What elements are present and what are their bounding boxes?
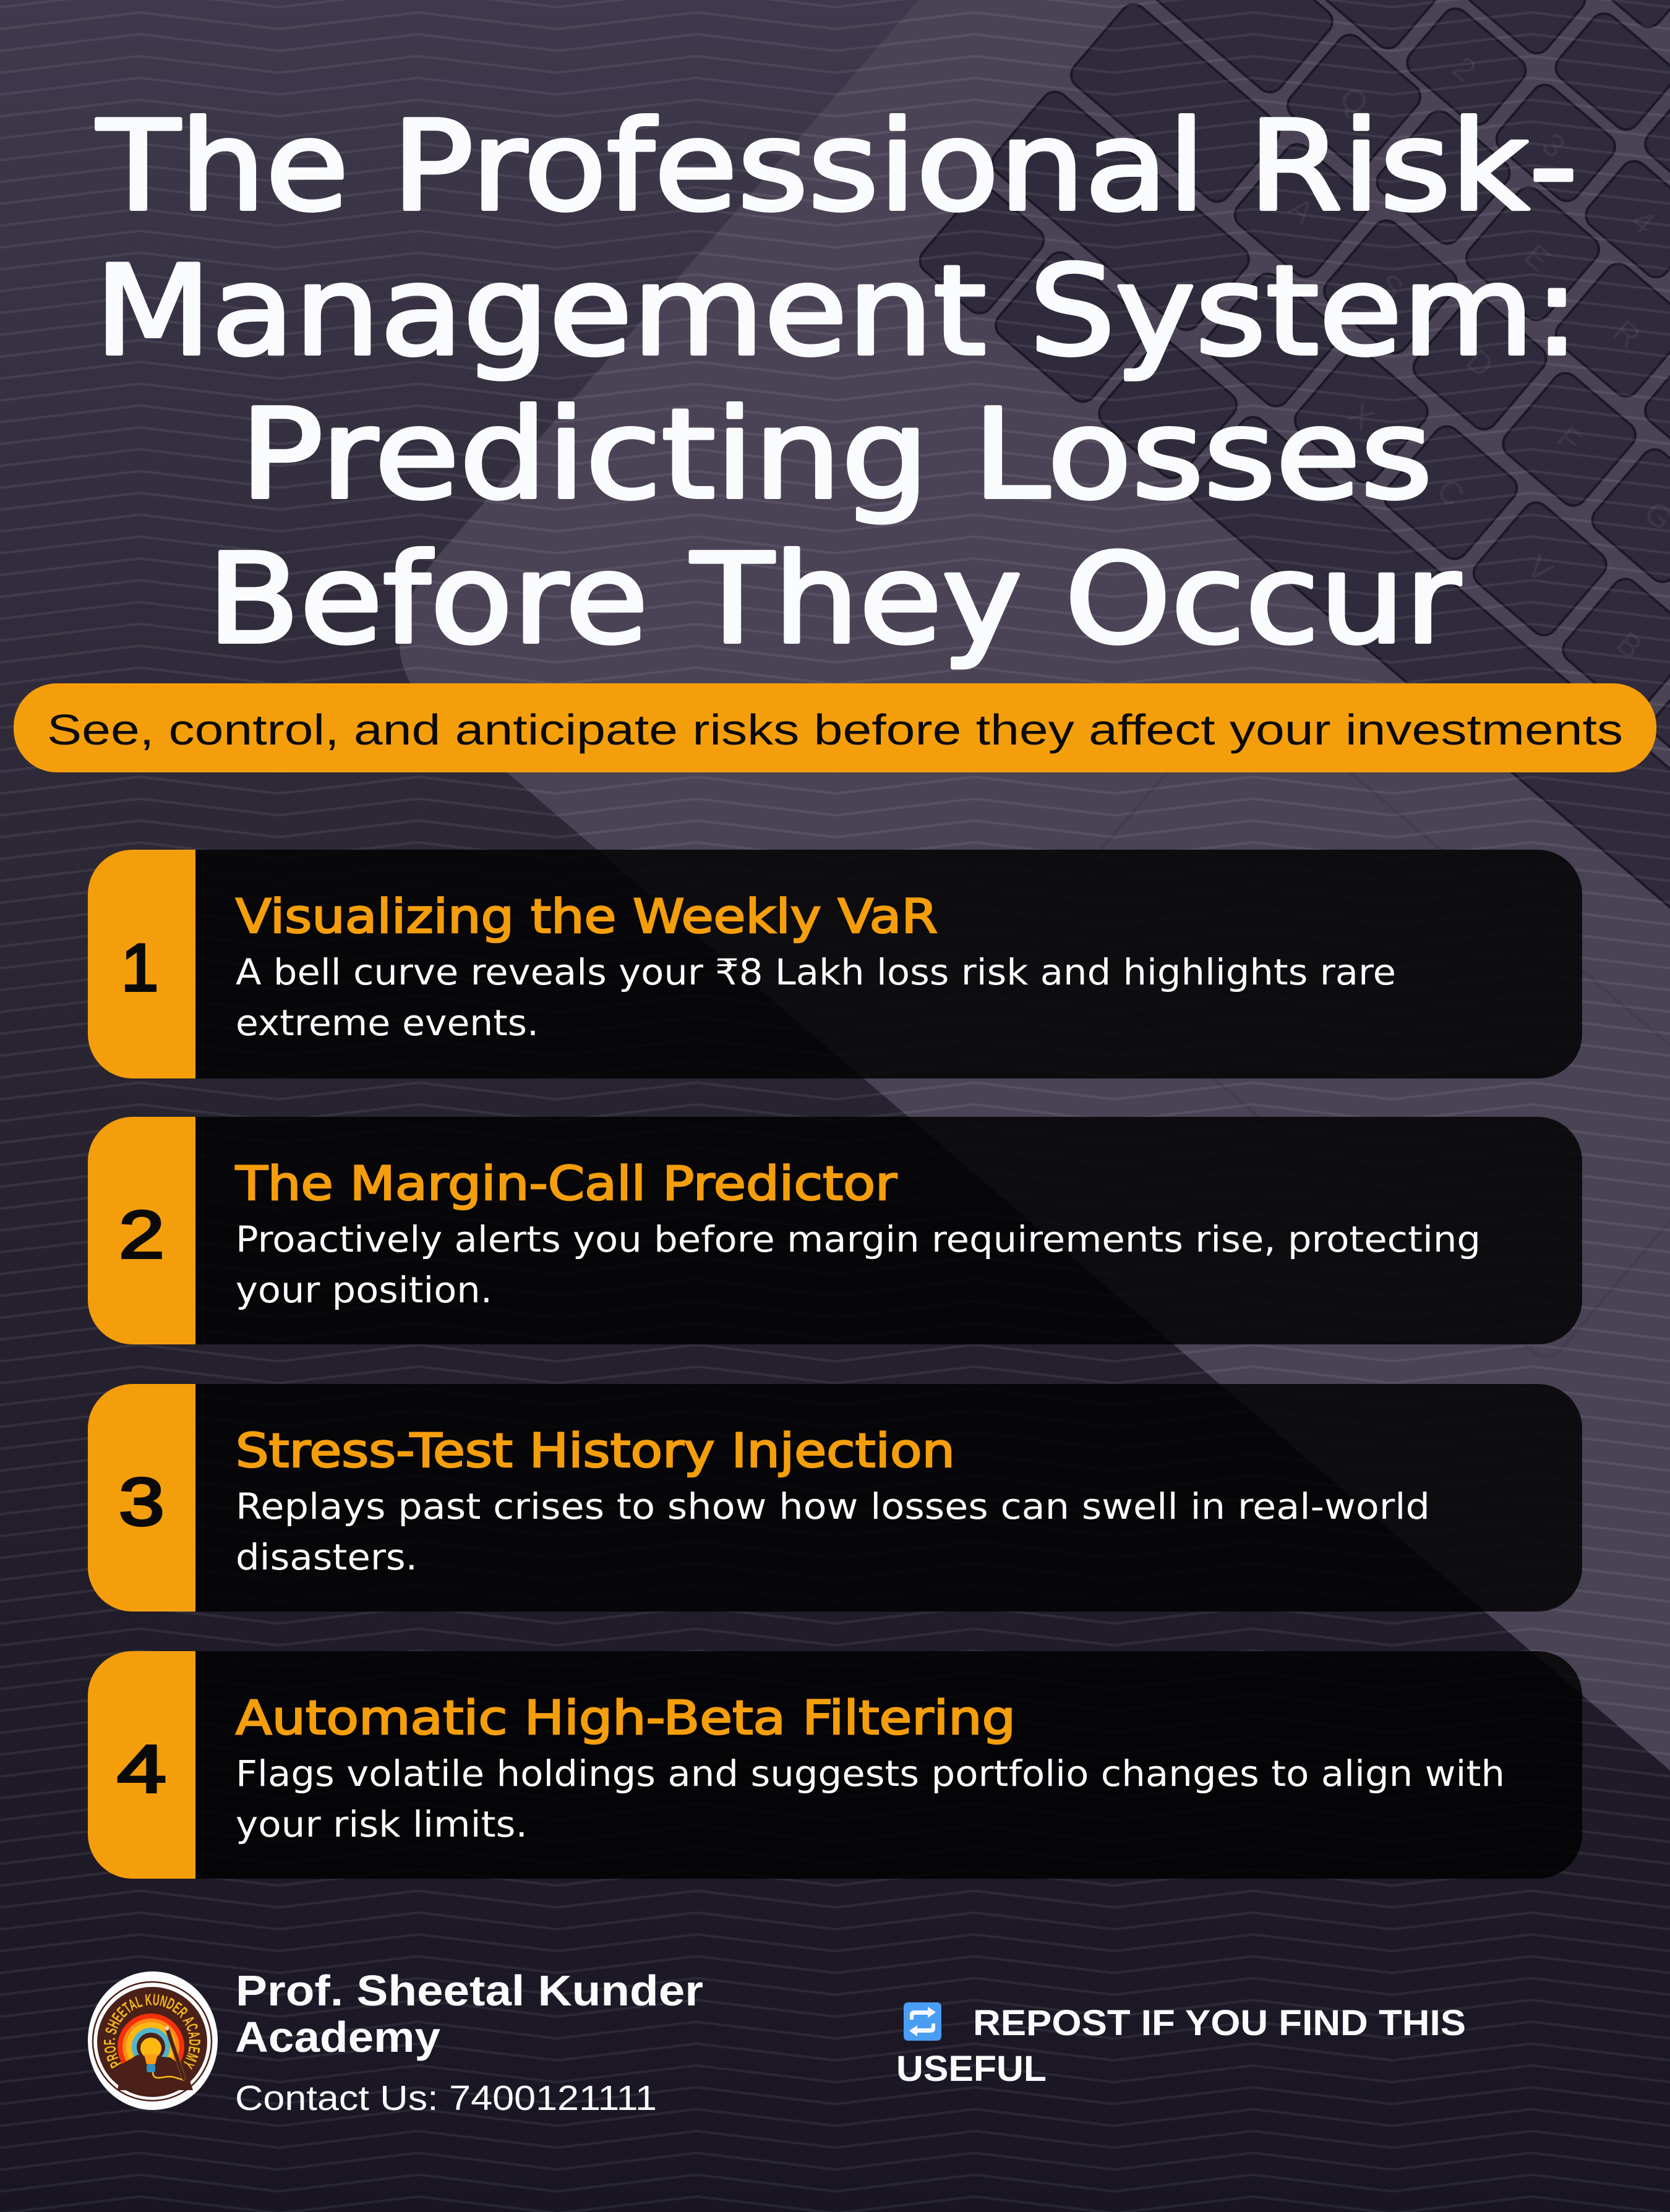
title: The Professional Risk-: [96, 95, 1578, 239]
title: Predicting Losses: [240, 383, 1432, 527]
card 1 number tab: [88, 850, 195, 1078]
keyboard key letters: R: [1606, 313, 1647, 356]
keyboard key letters: 3: [1535, 126, 1572, 165]
card 4 body: your risk limits.: [236, 1803, 528, 1845]
keyboard key letters: A: [1281, 190, 1321, 231]
academy name and contact: [235, 1966, 703, 2118]
title: Management System:: [95, 239, 1580, 383]
keyboard key letters: E: [1517, 237, 1557, 278]
title: Before They Occur: [207, 527, 1461, 672]
icon: academy logo: PROF. SHEETAL KUNDER ACADEMY: [104, 1994, 200, 2070]
card 3 number tab: 3: [119, 1464, 165, 1540]
card 3 body: disasters.: [236, 1536, 417, 1578]
subtitle pill: See, control, and anticipate risks before they affect your investments: [47, 706, 1623, 754]
keyboard key letters: X: [1341, 396, 1381, 437]
card 1 body: extreme events.: [236, 1002, 539, 1044]
keyboard key letters: D: [1459, 342, 1500, 385]
laptop trackpad outline: [1035, 682, 1670, 1364]
keyboard key letters: F: [1550, 420, 1588, 459]
panel: card 4: [88, 1651, 1582, 1879]
repost call to action: USEFUL: [896, 2049, 1047, 2089]
keyboard key letters: V: [1520, 549, 1560, 590]
panel: card 1: [88, 850, 1582, 1078]
card 3 body: [236, 1485, 1430, 1578]
card 2 number tab: 2: [119, 1197, 165, 1273]
keyboard key letters: 4: [1624, 203, 1661, 241]
card 2 body: your position.: [236, 1269, 492, 1311]
icon: academy logo: [88, 1971, 218, 2110]
icon: repost: [904, 2002, 941, 2041]
repost call to action: [896, 2003, 1466, 2089]
card 3 number tab: [88, 1384, 195, 1612]
keyboard key letters: B: [1609, 625, 1649, 666]
card 3 body: Replays past crises to show how losses can swell in real-world: [236, 1485, 1430, 1527]
card 2 body: [236, 1218, 1481, 1311]
title: [95, 95, 1580, 672]
laptop body: [400, 0, 1670, 1770]
panel: card 2: [88, 1117, 1582, 1344]
subtitle pill: [14, 683, 1656, 772]
card 3 heading: Stress-Test History Injection: [236, 1423, 955, 1478]
card 4 body: Flags volatile holdings and suggests portfolio changes to align with: [236, 1753, 1505, 1795]
card 1 body: A bell curve reveals your ₹8 Lakh loss risk and highlights rare: [236, 951, 1396, 993]
card 1 body: [236, 951, 1396, 1044]
card 4 body: [236, 1753, 1505, 1845]
academy name and contact: Contact Us: 7400121111: [235, 2078, 657, 2118]
card 4 heading: Automatic High-Beta Filtering: [236, 1690, 1016, 1745]
keyboard key letters: S: [1371, 267, 1410, 307]
card 4 number tab: [88, 1651, 195, 1879]
keyboard key letters: 2: [1445, 50, 1483, 89]
laptop keyboard keys: [908, 0, 1670, 1014]
card 1 heading: Visualizing the Weekly VaR: [236, 889, 938, 944]
card 2 body: Proactively alerts you before margin requirements rise, protecting: [236, 1218, 1481, 1260]
academy name and contact: Academy: [235, 2013, 440, 2061]
panel: card 3: [88, 1384, 1582, 1612]
card 1 number tab: 1: [121, 930, 158, 1006]
keyboard key letters: Q: [1333, 80, 1375, 123]
academy name and contact: Prof. Sheetal Kunder: [236, 1966, 703, 2015]
card 2 number tab: [88, 1117, 195, 1344]
keyboard key letters: [1180, 7, 1670, 666]
card 2 heading: The Margin-Call Predictor: [235, 1156, 897, 1211]
card 4 number tab: 4: [117, 1732, 166, 1807]
keyboard key letters: C: [1430, 472, 1471, 514]
repost call to action: REPOST IF YOU FIND THIS: [973, 2003, 1466, 2043]
background: laptop photo: [400, 0, 1670, 1770]
